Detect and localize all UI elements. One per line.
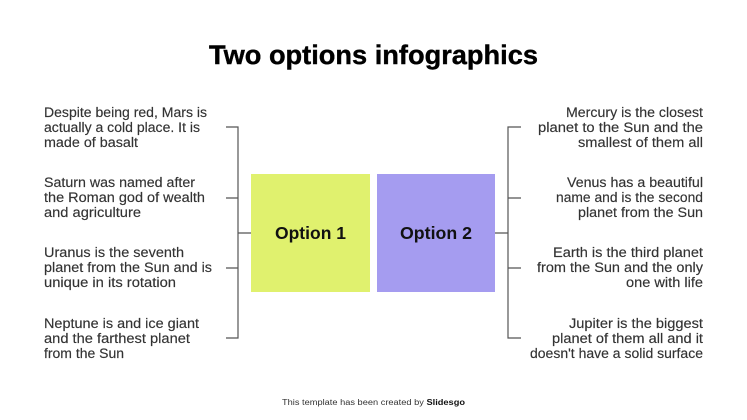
text block: Saturn: and agriculture — [44, 205, 141, 220]
text block: Saturn: Saturn was named after — [44, 175, 196, 190]
text block: Neptune: from the Sun — [44, 346, 124, 361]
title: Two options infographics — [209, 40, 538, 70]
text block: Mercury: planet to the Sun and the — [538, 120, 703, 135]
text block: Uranus: Uranus is the seventh — [44, 245, 184, 260]
text block: Earth: from the Sun and the only — [537, 260, 703, 275]
text block: Venus: planet from the Sun — [578, 205, 703, 220]
text block: Earth: Earth is the third planet — [553, 245, 703, 260]
text block: Jupiter — [530, 316, 703, 361]
text block: Earth — [537, 245, 703, 290]
text block: Mercury — [538, 105, 703, 150]
option 1 box: Option 1 — [275, 223, 346, 243]
text block: Venus: name and is the second — [556, 190, 703, 205]
text block: Uranus: unique in its rotation — [44, 275, 176, 290]
text block: Jupiter: doesn't have a solid surface — [530, 346, 703, 361]
text block: Jupiter: planet of them all and it — [552, 331, 703, 346]
option 2 box — [377, 174, 495, 292]
bracket connector: right — [495, 127, 521, 338]
panel: left text column — [44, 105, 212, 361]
text block: Venus — [556, 175, 703, 220]
footer credit: This template has been created by Slidesgo — [282, 398, 465, 407]
text block: Venus: Venus has a beautiful — [567, 175, 703, 190]
text block: Uranus — [44, 245, 212, 290]
text block: Neptune: and the farthest planet — [44, 331, 190, 346]
option 1 box — [251, 174, 370, 292]
text block: Jupiter: Jupiter is the biggest — [569, 316, 703, 331]
panel: right text column — [530, 105, 703, 361]
text block: Mars: actually a cold place. It is — [44, 120, 200, 135]
text block: Neptune — [44, 316, 199, 361]
text block: Mars — [44, 105, 207, 150]
text block: Mars: Despite being red, Mars is — [44, 105, 207, 120]
text block: Saturn: the Roman god of wealth — [44, 190, 205, 205]
bracket connector: left — [226, 127, 251, 338]
text block: Earth: one with life — [626, 275, 703, 290]
text block: Mercury: smallest of them all — [578, 135, 703, 150]
text block: Mars: made of basalt — [44, 135, 138, 150]
text block: Saturn — [44, 175, 205, 220]
text block: Neptune: Neptune is and ice giant — [44, 316, 199, 331]
text block: Mercury: Mercury is the closest — [566, 105, 703, 120]
option 2 box: Option 2 — [400, 223, 472, 243]
text block: Uranus: planet from the Sun and is — [44, 260, 212, 275]
